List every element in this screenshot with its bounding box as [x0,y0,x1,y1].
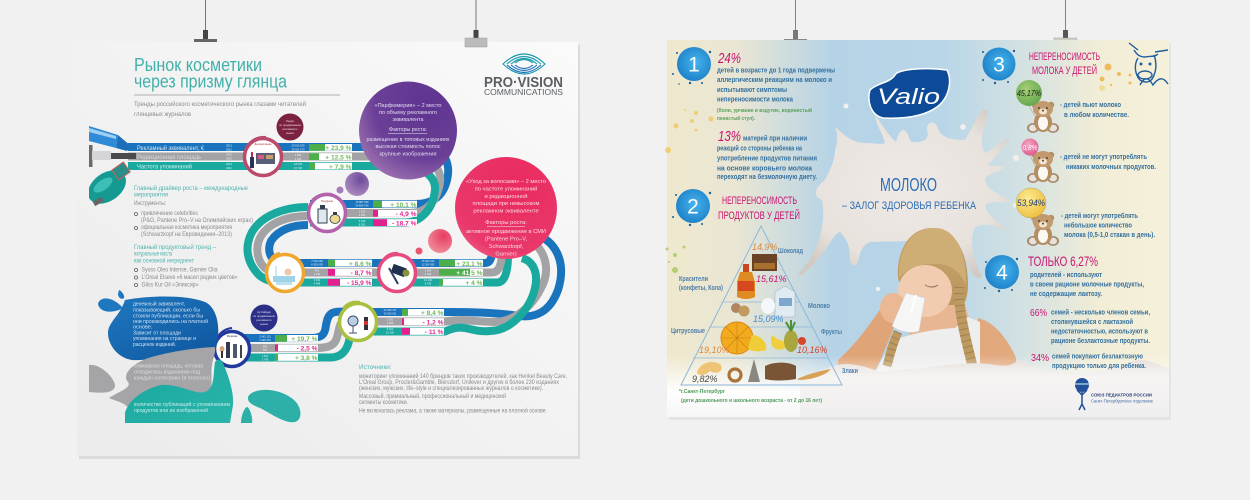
decorative balls [336,172,452,254]
section 3 [982,43,1168,246]
right braid [959,287,972,364]
section 2 heading [672,189,800,226]
callout: hair care pink circle: рекламном эквиваленте [473,208,539,214]
band 3 data rows: 15 032 310 [422,259,435,263]
text block: product trend: Gliss Kur Oil «Эликсир» [142,282,199,288]
band 3 data rows: + 23,1 % [456,261,483,268]
footnote: *г.Санкт-Петербург [679,388,726,395]
pyramid values: 19,10% [699,345,730,355]
blob: blue legend: расценок изданий. [133,341,176,348]
leader callout: navy circle: по продвижению [253,314,275,318]
blob: teal legend: количество публикаций с упоминанием [134,401,230,408]
callout: perfume purple circle: размещение в топовых изданиях [366,137,450,143]
decorative applicators [89,126,136,206]
text block: sources: Источники: [359,364,392,371]
band 4 data rows: 1 064 [387,321,394,325]
text block: main driver: (Schwarzkopf на Евровидении–2013) [141,232,232,238]
callout: hair care pink circle: площади при невысоком [473,201,539,207]
item: 53,94%: 53,94% [1017,198,1045,208]
pyramid values [692,242,828,384]
item: 0,8%: никаких молочных продуктов. [1066,164,1156,171]
band 2 data rows: 15 887 030 [356,200,369,204]
section 1: испытывают симптомы [717,87,787,94]
milk droplets [844,104,1019,291]
band 5 data rows: 553 [263,344,268,348]
title: через призму глянца [134,72,288,92]
pyramid values: 14,9% [752,242,778,252]
category circle: perfume [308,194,346,232]
callout: perfume purple circle: высокая стоимость полос [376,144,441,150]
right arm [975,318,1016,372]
section 4: рационе безлактозные продукты. [1051,337,1150,345]
band 3 data rows: 12 204 382 [422,262,435,266]
item: 0,8%: 0,8% [1022,145,1038,152]
leader callout: navy circle: рекламного [256,318,272,322]
neck and chest [905,305,972,342]
band 3 data rows: 10 190 [424,278,433,282]
subtitle: Тренды российского косметического рынка глазами читателей [134,101,306,108]
hair back [898,228,968,316]
ribbon chart: flowing bands [128,147,561,358]
text block: sources: Массовый, премиальный, профессиональный и медицинский [359,393,506,400]
pyramid labels: Молоко [808,303,830,310]
category circle: men's care [214,328,250,366]
pyramid labels: (конфеты, Кола) [679,285,723,292]
band 4 data rows: - 1,2 % [423,319,444,326]
section 1: 24% [717,50,741,67]
main heading: – ЗАЛОГ ЗДОРОВЬЯ РЕБЕНКА [842,200,977,212]
band 5 data rows: + 3,8 % [295,355,318,362]
category circle: decorative cosmetics [244,137,282,176]
badge 1 [672,47,711,85]
text block: sources: L'Oreal Group, Procter&Gamble, Biersdorf, Unilever и других в более 230 изданиях [359,380,559,386]
item: 45,17% [1016,80,1129,133]
leader callout: navy circle [250,304,278,332]
logo: Valio [869,69,950,118]
category circle: decorative cosmetics: Декоративная [255,142,272,146]
text block: sources [359,364,567,414]
band 2 data rows: 1 064 [359,213,366,217]
footnote [679,388,822,404]
text block: product trend: L'Oreal Elseve «6 масел редких цветов» [142,275,238,281]
text block: product trend: Главный продуктовый тренд – [134,243,216,251]
band 5 data rows: 1 745 [262,358,269,362]
band 5 data rows: 2 042 131 [259,334,271,338]
section 1: (боли, урчание и вздутие, водянистый [717,107,812,114]
section 1: аллергическим реакциям на молоко и [717,77,832,84]
text block: product trend: Syoss Oleo Intense, Garnier Olia [142,268,218,274]
band 3 data rows: 7 504 209 [311,259,323,263]
blob: blue legend: денежный эквивалент, [133,300,185,308]
band 1 data rows: + 7,9 % [329,164,352,171]
text block: sources: Не включалась реклама, а также материалы, размещенные на платной основе. [359,408,547,414]
text block: product trend: натуральные масла [134,250,172,258]
text block: sources: мониторинг упоминаний 140 брендов таких производителей, как Henkel Beauty Care, [359,373,567,380]
text block: main driver: привлечение celebrities [141,211,198,217]
text block: main driver [134,184,253,238]
band 1 data rows: 2013 [226,144,232,148]
left arm [838,302,900,372]
blob: blue legend: основе. [133,324,153,330]
text block: main driver: (P&G, Pantene Pro–V на Олимпийских играх) [141,217,253,224]
icon: milk carton [761,286,795,317]
item: 53,94%: - детей могут употреблять [1061,212,1139,220]
band 1 data rows: 18 040 [294,162,303,166]
band 1 data rows: 2013 [226,162,232,166]
icon: chocolate [752,254,777,271]
text block: product trend [134,243,238,288]
blob: blue legend: показывающий, сколько бы [133,306,200,314]
badge 2: 2 [687,196,699,218]
icon: fruits [771,320,806,352]
band 3 data rows: 4 043 [314,282,321,286]
item: 53,94%: небольшое количество [1064,222,1132,230]
logo: Union of Pediatricians: СОЮЗ ПЕДИАТРОВ РОССИИ [1091,392,1152,398]
text block: main driver: мероприятия [134,192,168,198]
hair top [899,228,966,285]
badge 3 [982,48,1016,84]
text block: main driver: Главный драйвер роста – международные [134,184,248,192]
category circle: men's care: Мужская [227,334,238,338]
band 1 data rows: 16 720 [294,166,303,170]
band 3 data rows: 9 790 [425,282,432,286]
band 2 data rows: 8 281 [359,222,366,226]
band 2 data rows: 1 013 [359,210,366,214]
pyramid values: 10,16% [797,345,828,355]
band 3 data rows: - 15,9 % [347,280,372,287]
item: 53,94% [1016,188,1155,246]
section 2 heading: ПРОДУКТОВ У ДЕТЕЙ [718,209,800,222]
blob: grey legend: суммарная площадь, которая [134,364,203,370]
section 1: реакций со стороны ребенка на [717,144,802,152]
title [134,55,340,95]
legend blobs [89,290,300,423]
badge 1: 1 [688,54,700,76]
pyramid values: 9,82% [692,374,718,384]
callout: hair care pink circle [455,157,557,259]
logo: Union of Pediatricians [1075,378,1154,410]
band 1 data rows: 20 911 470 [292,148,305,152]
footnote: (дети дошкольного и школьного возраста - от 2 до 16 лет) [681,398,822,404]
main heading [842,175,977,212]
food pyramid [671,226,858,385]
milk splash [798,110,1010,278]
band 1 data rows: + 23,9 % [325,145,352,152]
logo: Valio: Valio [877,84,940,109]
callout: perfume purple circle [359,82,457,180]
band 4 data rows: 14 430 747 [384,308,397,312]
band 2 data rows: + 10,1 % [390,202,417,209]
icon: grains and bread [697,359,830,382]
text block: product trend: как основной ингредиент [134,256,194,264]
band 2 data rows: - 4,9 % [396,211,417,218]
item: 0,8% [1022,138,1156,183]
band 3 data rows: + 8,6 % [349,261,372,268]
section 4: 34% [1031,353,1049,364]
section 4: семей - несколько членов семьи, [1051,308,1150,316]
section 3: НЕПЕРЕНОСИМОСТЬ [1029,51,1100,63]
band 1 data rows: 2012 [226,148,232,152]
band 2 data rows: 6 249 [359,219,366,223]
band 5 data rows: 1 811 [262,354,269,358]
section 1: непереносимости молока [717,96,793,104]
item: 45,17%: - детей пьют молоко [1060,101,1121,109]
callout: hair care pink circle: Schwarzkopf, [489,244,524,250]
band 3 data rows: 6 903 029 [311,262,323,266]
band 4 data rows: - 11 % [425,329,444,336]
row labels [137,145,205,170]
dress [875,317,980,372]
blob: blue legend: упоминания на странице и [133,336,196,342]
band 4 data rows: 10 250 [386,330,395,334]
band 4 data rows [384,308,444,336]
band 3 data rows: 941 [315,268,320,272]
blob: blue legend: стоили публикации, если бы [133,314,203,320]
band 1 data rows: + 12,5 % [325,154,352,161]
blob: teal legend [125,360,233,423]
band 2 data rows: - 18,7 % [392,220,417,227]
section 1: детей в возрасте до 1 года подвержены [717,66,835,74]
section 4 [984,253,1150,370]
band 3 data rows: + 4 % [465,280,483,287]
band 1 data rows: 2013 [226,152,232,156]
blob: blue legend [108,296,218,360]
band 1 data rows: 2012 [226,166,232,170]
band 4 data rows: 1 051 [387,318,394,322]
photo: girl drinking milk [838,228,1016,372]
item: 45,17%: в любом количестве. [1064,111,1129,119]
band 5 data rows [259,334,318,362]
paint spots [665,64,1132,273]
item: 0,8%: - детей не могут употреблять [1060,153,1148,161]
row labels: Частота упоминаний [137,164,192,170]
section 1 [672,47,835,181]
category circle: perfume: Парфюм [321,199,333,203]
band 1 data rows: 1 031 [295,157,302,161]
category circle: hair care [378,253,416,292]
milk wave foot [667,355,1169,417]
callout: hair care pink circle: Факторы роста: [485,220,527,226]
callout: hair care pink circle: активное продвижение в СМИ [466,229,546,235]
pyramid values: 15,61% [756,274,787,284]
leader callout: maroon circle [276,114,304,140]
band 1 data rows: 1 053 [295,153,302,157]
leader callout: navy circle: Аутсайдер [257,310,271,314]
blob: teal legend: продуктов или их изображений [134,407,208,414]
blob: grey legend: отводилась изданиями под [134,370,201,376]
callout: perfume purple circle: «Парфюмерия» – 2 место [374,103,442,109]
row labels: Рекламный эквивалент, € [137,145,205,152]
band 4 data rows: + 8,4 % [421,310,444,317]
logo: Union of Pediatricians: Санкт-Петербургское отделение [1091,398,1154,404]
band 1 data rows: 25 910 530 [292,144,305,148]
leader callout: maroon circle: рынка [286,131,294,135]
main heading: МОЛОКО [880,175,937,195]
leader callout: navy circle: рынка [260,322,268,326]
section 4: продукцию только для ребенка. [1052,362,1146,370]
callout: perfume purple circle: крупные изображения [380,152,436,158]
band 3 data rows [311,259,483,287]
section 4: столкнувшейся с лактазной [1051,318,1133,326]
text block: main driver: официальная косметика мероприятия [141,225,232,231]
band 3 data rows: 3 401 [314,278,321,282]
icon: nail brush [89,145,136,167]
category circle: bath [266,253,304,292]
callout: hair care pink circle: Garnier) [495,252,517,258]
callout: hair care pink circle: (Pantene Pro–V, [485,236,528,242]
poster: cosmetics market [77,42,580,459]
band 5 data rows: + 19,7 % [291,336,318,343]
leader callout: maroon circle: по продвижению [279,123,301,127]
pyramid labels [671,248,858,375]
callout: hair care pink circle: «Уход за волосами» – 2 место [466,179,546,185]
section 1: переходят на безмолочную диету. [717,173,817,181]
drops [89,290,300,423]
section 1: матерей при наличии [743,134,807,142]
callout: perfume purple circle: по объему рекламного [379,110,437,116]
left braid [887,332,898,366]
section 4: ТОЛЬКО 6,27% [1028,253,1098,269]
band 4 data rows: 13 316 011 [384,312,397,316]
pyramid labels: Фрукты [821,329,842,336]
blob: grey legend: каждую категорию (в полосах) [134,376,210,382]
band 5 data rows: 567 [263,348,268,352]
hand [880,293,906,323]
band 3 data rows: 1 031 [314,272,321,276]
callout: hair care pink circle: по частоте упоминаний [475,186,537,192]
pyramid labels: Цитрусовые [671,328,705,335]
section 1: на основе коровьего молока [717,166,812,172]
band 4 data rows: 8 104 [387,327,394,331]
leader callout: maroon circle: Лидер [286,119,295,123]
pyramid labels: Красители [679,276,708,283]
icon: teal perfume bottle [89,161,131,206]
logo: Pro-Vision: PRO·VISION [484,75,563,91]
section 1: 13% [718,128,741,145]
section 1: употребление продуктов питания [717,154,817,162]
logo: Pro-Vision: COMMUNICATIONS [484,88,563,97]
icon: sauce bottle [737,264,755,299]
band 5 data rows: 1 349 210 [259,338,271,342]
section 2 heading: НЕПЕРЕНОСИМОСТЬ [722,195,797,207]
title: Рынок косметики [134,55,262,75]
badge 4 [984,255,1019,292]
pyramid values: 15,09% [753,314,784,324]
icon: eye rings [503,54,545,74]
blob: blue legend: Зависит от площади [133,330,181,336]
callout: perfume purple circle: эквивалента [392,117,424,123]
category circle: face care [340,302,376,340]
section 3: МОЛОКА У ДЕТЕЙ [1032,64,1097,77]
band 2 data rows: 24 836 704 [356,204,369,208]
text block: sources: (женских, мужских, life–style и специализированных журналов о косметике). [359,386,543,392]
pyramid labels: Злаки [842,368,858,375]
poster: milk for children [665,40,1171,420]
badge 3: 3 [993,54,1005,76]
blob: blue legend: они производились на платной [133,318,208,325]
icon: blue tube [89,126,131,151]
text block: sources: сегменты косметики. [359,400,408,406]
subtitle: глянцевых журналов [134,112,191,118]
glass of milk [892,293,925,332]
leader callout: maroon circle: рекламного [282,127,298,131]
item: 45,17%: 45,17% [1017,89,1041,98]
section 4: в своем рационе молочные продукты, [1030,282,1144,288]
badge 4: 4 [996,262,1008,284]
icon: orange [721,322,766,354]
band 3 data rows: - 8,7 % [351,270,372,277]
band 3 data rows: 2 094 [425,272,432,276]
logo: Pro-Vision [484,54,563,97]
subtitle [134,101,306,118]
icon: cow [1129,43,1168,85]
section 4: семей покупают безлактозную [1052,352,1143,360]
hanging clips [194,0,1077,47]
callout: perfume purple circle: Факторы роста: [389,127,427,133]
section 4: родителей - используют [1030,271,1102,279]
band 1 data rows: 2012 [226,156,232,160]
band 1 data rows [137,144,352,171]
icon: nuts [731,303,750,316]
band 3 data rows: + 41,5 % [456,270,483,277]
section 4: недостаточностью, используют в [1051,328,1149,336]
section 4: не содержащие лактозу. [1030,291,1102,298]
eye [925,285,938,287]
blob: grey legend [109,347,215,412]
band 5 data rows: - 2,5 % [297,346,318,353]
pyramid labels: Шоколад [778,248,803,255]
band 3 data rows: 2 964 [425,268,432,272]
item: 53,94%: молока (0,5-1,0 стакан в день). [1064,232,1155,239]
row labels: Редакционная площадь [137,155,201,161]
face [898,265,952,317]
section 4: 66% [1030,308,1047,319]
callout: hair care pink circle: и редакционной [485,193,527,200]
band 2 data rows [356,200,417,227]
text block: main driver: Инструменты: [134,201,166,207]
section 1: пенистый стул). [717,115,755,122]
